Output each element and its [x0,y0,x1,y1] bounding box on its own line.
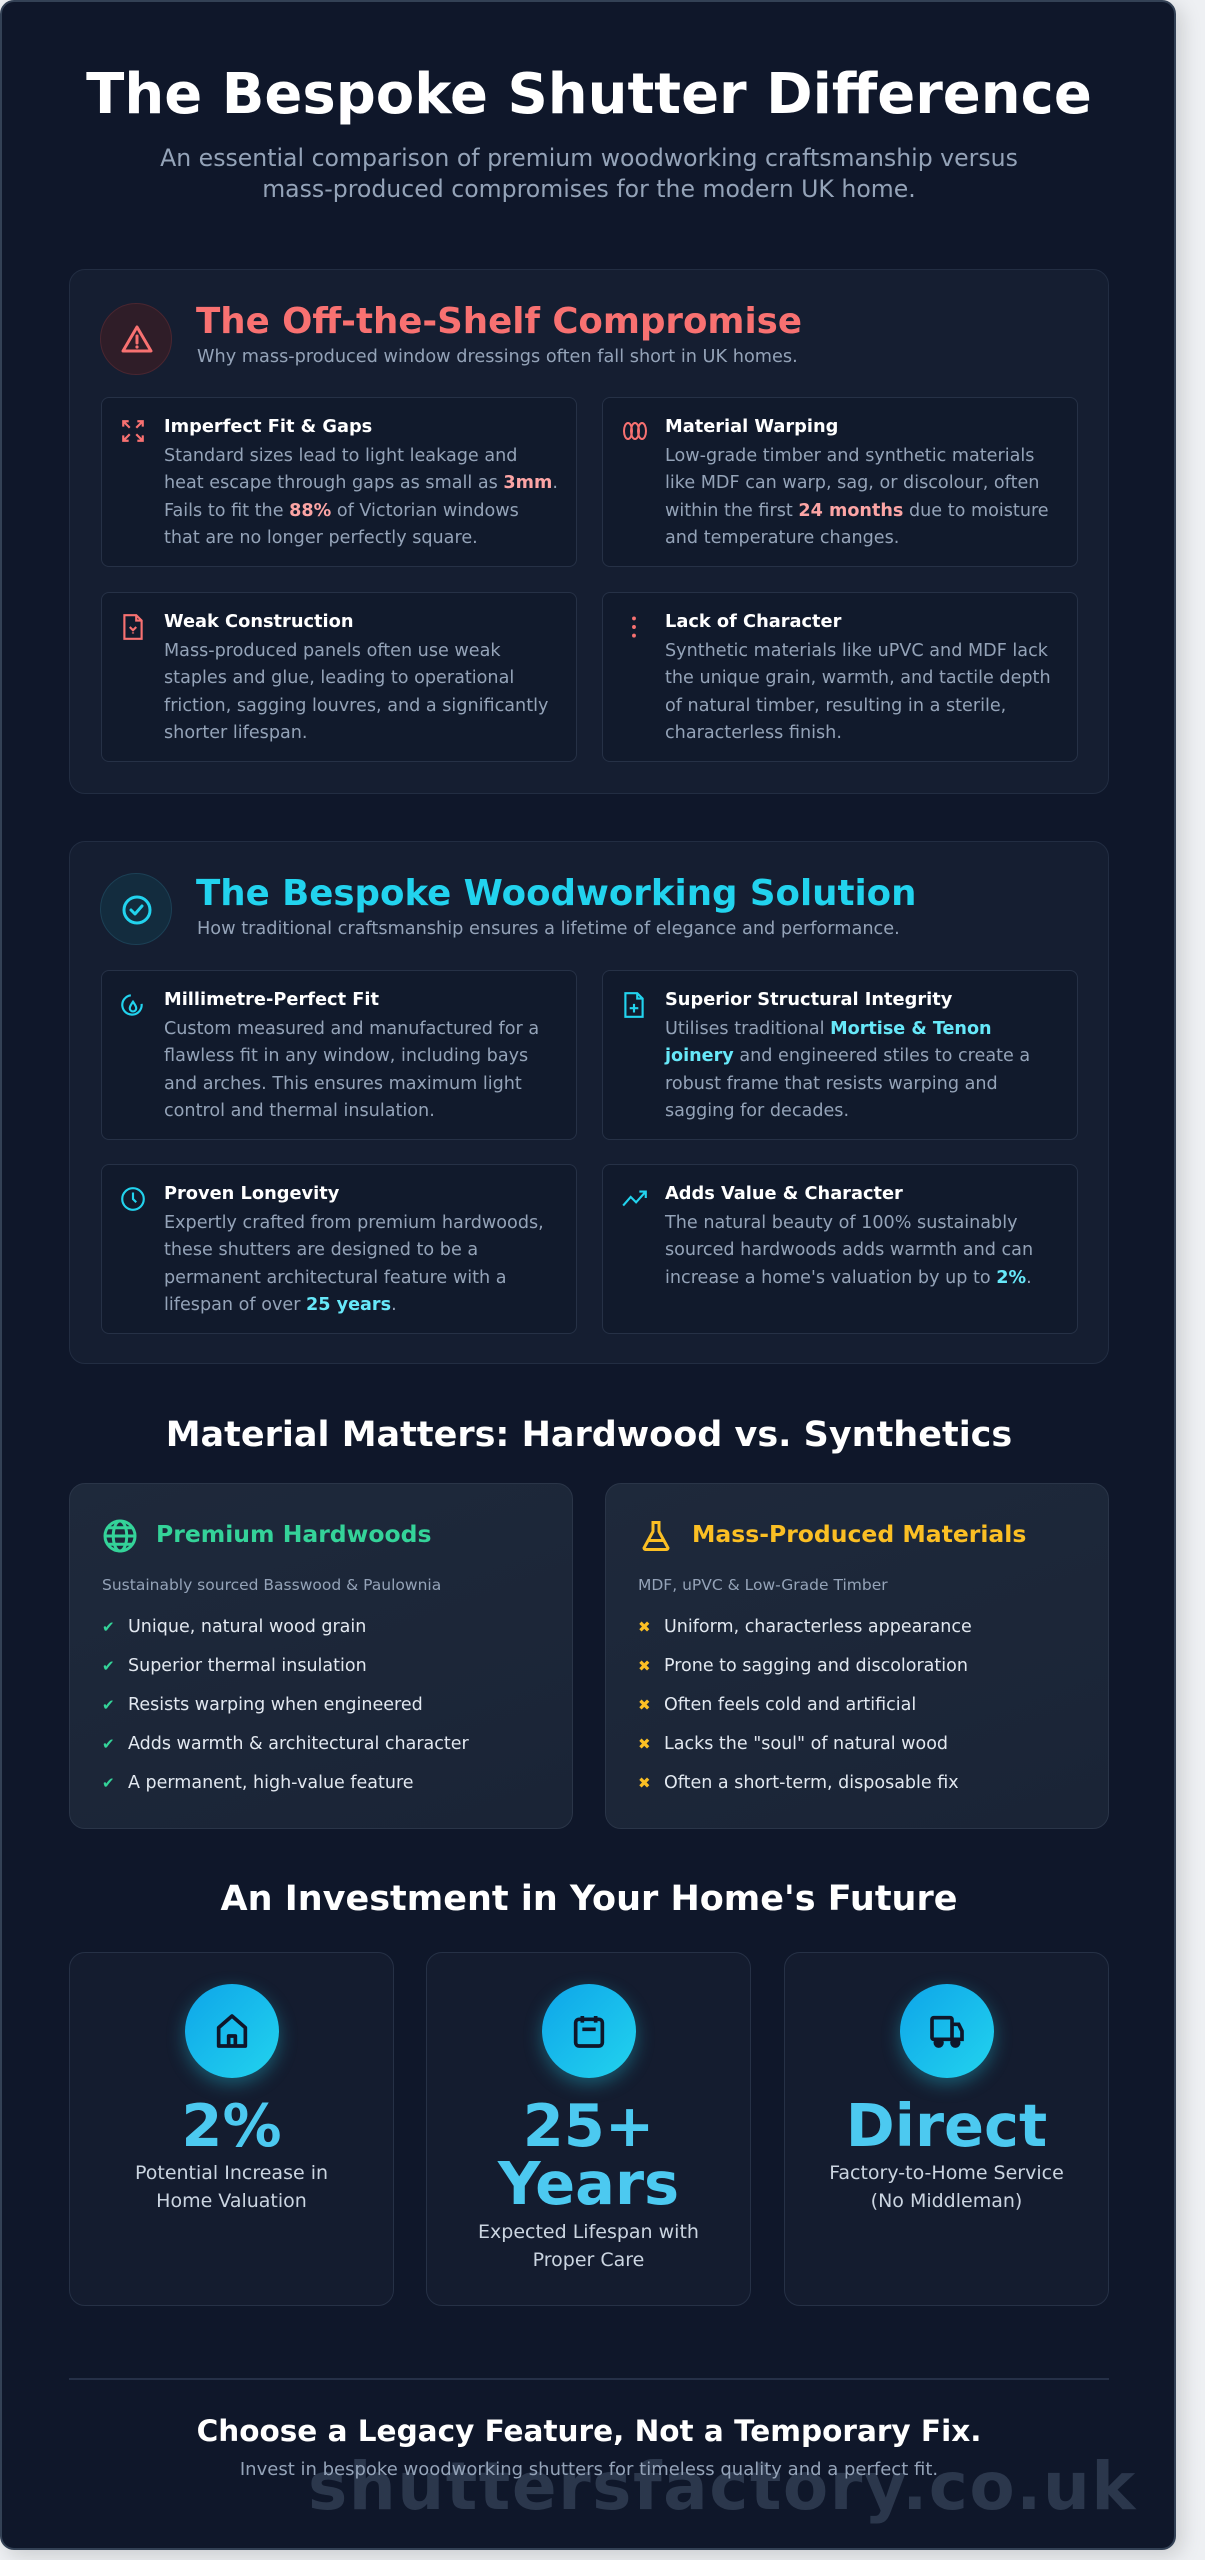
card: millimetre fit: Millimetre-Perfect Fit [164,989,379,1010]
list: pros: ✔ [102,1735,115,1753]
icon: globe [104,1520,136,1552]
list: pros: Adds warmth & architectural character [128,1734,469,1754]
card: lack of character: Lack of Character [665,611,841,632]
card: structural integrity: robust frame that resists warping and [665,1074,998,1094]
heading: investment: An Investment in Your Home's Future [221,1879,957,1919]
list: pros: A permanent, high-value feature [128,1773,414,1793]
stat: 25+ years: Proper Care [533,2249,644,2271]
card: imperfect fit: Standard sizes lead to light leakage and [164,446,517,466]
card: imperfect fit: Fails to fit the 88% of Victorian windows [164,501,519,521]
card: material warping: within the first 24 months due to moisture [665,501,1049,521]
list: cons: ✖ [638,1735,651,1753]
subtitle: An essential comparison of premium woodworking craftsmanship versus [160,144,1018,172]
footer heading: Choose a Legacy Feature, Not a Temporary Fix. [197,2414,981,2448]
card: weak construction: friction, sagging louvres, and a significantly [164,696,548,716]
watermark: shuttersfactory.co.uk [308,2448,1137,2525]
subtitle: mass-produced compromises for the modern UK home. [262,175,916,203]
card: adds value [602,1164,1078,1334]
icon: trend up [622,1190,647,1206]
list: cons: ✖ [638,1657,651,1675]
stat: 25+ years [426,1952,751,2306]
stat: direct: Direct [846,2091,1047,2160]
card: longevity: Expertly crafted from premium hardwoods, [164,1213,544,1233]
stat: direct: Factory-to-Home Service [829,2162,1064,2184]
list: cons: Prone to sagging and discoloration [664,1656,968,1676]
list: cons: ✖ [638,1618,651,1636]
stat: 25+ years: 25+ [523,2091,654,2160]
icon: target drop [121,994,143,1016]
title: The Bespoke Shutter Difference [86,62,1092,127]
list: pros: ✔ [102,1774,115,1792]
stat: 2%: 2% [181,2091,282,2160]
stat: direct [784,1952,1109,2306]
card: longevity: permanent architectural feature with a [164,1268,507,1288]
card: imperfect fit: Imperfect Fit & Gaps [164,416,372,437]
icon: clock [121,1187,145,1211]
icon: warp [623,422,647,440]
heading: The Bespoke Woodworking Solution [196,873,916,914]
list: pros [102,1617,469,1793]
panel: premium hardwoods: Sustainably sourced Basswood & Paulownia [102,1576,441,1594]
heading: material matters: Material Matters: Hardwood vs. Synthetics [166,1415,1012,1455]
card: weak construction: Weak Construction [164,611,354,632]
footer subtext: Invest in bespoke woodworking shutters for timeless quality and a perfect fit. [240,2459,938,2480]
card: adds value: sourced hardwoods adds warmth and can [665,1240,1033,1260]
list: pros: Superior thermal insulation [128,1656,367,1676]
card: millimetre fit [101,970,577,1140]
card: longevity [101,1164,577,1334]
icon: warning [100,303,172,375]
card: millimetre fit: and arches. This ensures maximum light [164,1074,522,1094]
card: structural integrity: joinery and engineered stiles to create a [665,1046,1030,1066]
list: cons: Uniform, characterless appearance [664,1617,972,1637]
panel: bespoke solution [69,841,1109,1364]
panel: mass-produced materials: Mass-Produced Materials [692,1520,1026,1548]
icon: truck [900,1984,994,2078]
card: material warping: and temperature changes. [665,528,899,548]
card: longevity: lifespan of over 25 years. [164,1295,397,1315]
list: pros: Unique, natural wood grain [128,1617,366,1637]
list: pros: ✔ [102,1696,115,1714]
card: structural integrity: Utilises traditional Mortise & Tenon [665,1019,992,1039]
card: material warping: like MDF can warp, sag, or discolour, often [665,473,1039,493]
card: structural integrity [602,970,1078,1140]
list: pros: ✔ [102,1657,115,1675]
stat: direct: (No Middleman) [871,2190,1022,2212]
card: longevity: Proven Longevity [164,1183,339,1204]
card: lack of character: characterless finish. [665,723,842,743]
card: imperfect fit [101,397,577,567]
card: adds value: Adds Value & Character [665,1183,903,1204]
subheading: How traditional craftsmanship ensures a lifetime of elegance and performance. [197,919,900,939]
icon: check circle [100,873,172,945]
panel: mass-produced materials: MDF, uPVC & Low-Grade Timber [638,1576,888,1594]
icon: flask [642,1521,670,1551]
card: weak construction: Mass-produced panels often use weak [164,641,501,661]
heading: The Off-the-Shelf Compromise [196,301,802,342]
list: cons: ✖ [638,1774,651,1792]
list: cons: Often a short-term, disposable fix [664,1773,959,1793]
icon: house [185,1984,279,2078]
stat: 2%: Home Valuation [156,2190,307,2212]
card: longevity: these shutters are designed to be a [164,1240,478,1260]
icon: calendar [542,1984,636,2078]
subheading: Why mass-produced window dressings often fall short in UK homes. [197,347,798,367]
list: pros: Resists warping when engineered [128,1695,423,1715]
list: cons [638,1617,972,1793]
panel: premium hardwoods [69,1483,573,1829]
card: structural integrity: sagging for decades. [665,1101,849,1121]
list: pros: ✔ [102,1618,115,1636]
card: material warping: Material Warping [665,416,838,437]
panel: premium hardwoods: Premium Hardwoods [156,1520,431,1548]
card: weak construction [101,592,577,762]
list: cons: ✖ [638,1696,651,1714]
subtitle [160,144,1018,203]
icon: file plus [624,992,644,1018]
list: cons: Lacks the "soul" of natural wood [664,1734,948,1754]
card: imperfect fit: heat escape through gaps as small as 3mm. [164,473,558,493]
icon: file [123,614,143,640]
card: imperfect fit: that are no longer perfectly square. [164,528,478,548]
panel: off-the-shelf compromise [69,269,1109,794]
card: millimetre fit: control and thermal insulation. [164,1101,435,1121]
card: lack of character: of natural timber, resulting in a sterile, [665,696,1006,716]
list: cons: Often feels cold and artificial [664,1695,916,1715]
card: millimetre fit: flawless fit in any window, including bays [164,1046,528,1066]
card: material warping [602,397,1078,567]
card: millimetre fit: Custom measured and manufactured for a [164,1019,539,1039]
icon: dots [632,616,636,638]
stat: 25+ years: Years [498,2149,679,2218]
icon: expand arrows [122,420,144,442]
card: structural integrity: Superior Structural Integrity [665,989,952,1010]
stat: 2%: Potential Increase in [135,2162,328,2184]
card: material warping: Low-grade timber and synthetic materials [665,446,1034,466]
card: lack of character: the unique grain, warmth, and tactile depth [665,668,1051,688]
card: adds value: The natural beauty of 100% sustainably [665,1213,1018,1233]
card: lack of character [602,592,1078,762]
stat: 2% [69,1952,394,2306]
card: weak construction: shorter lifespan. [164,723,308,743]
panel: mass-produced materials [605,1483,1109,1829]
card: adds value: increase a home's valuation by up to 2%. [665,1268,1032,1288]
stat: 25+ years: Expected Lifespan with [478,2221,699,2243]
card: lack of character: Synthetic materials like uPVC and MDF lack [665,641,1048,661]
card: weak construction: staples and glue, leading to operational [164,668,514,688]
